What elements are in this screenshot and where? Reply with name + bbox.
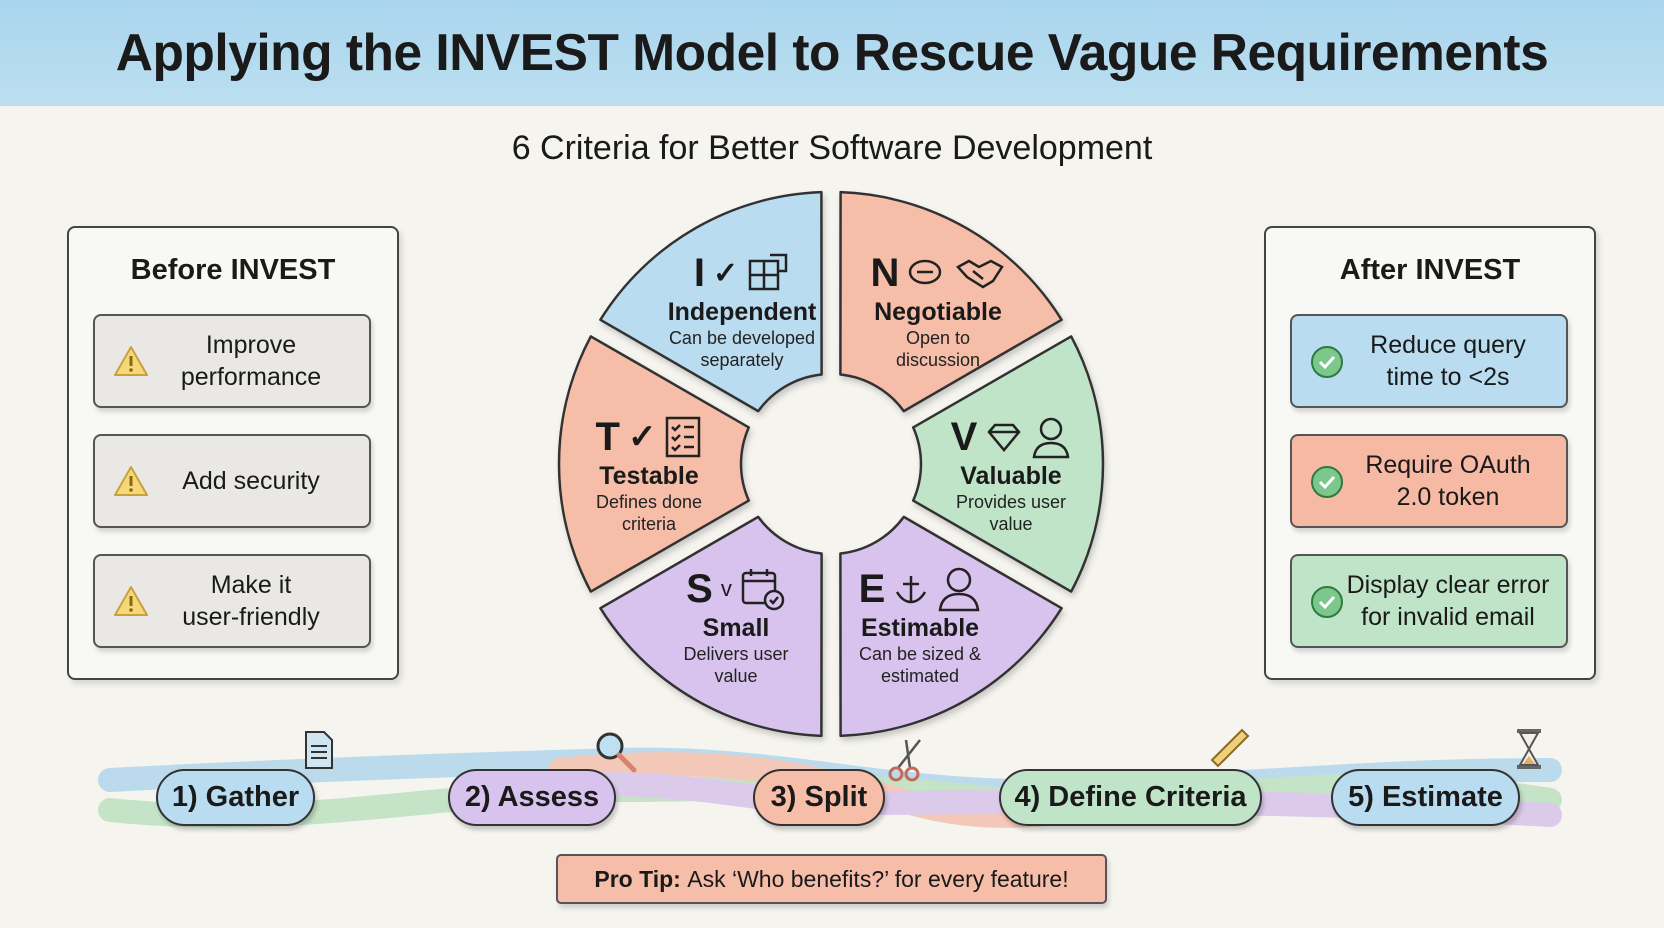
pill: estimate xyxy=(1331,769,1520,826)
callout: pro tip: Ask ‘Who benefits?’ for every feature! xyxy=(687,866,1069,892)
segment: Estimable: Estimable xyxy=(861,614,979,642)
item: require oauth xyxy=(1290,434,1568,528)
item: require oauth: Require OAuth xyxy=(1365,451,1531,479)
title: Applying the INVEST Model to Rescue Vague Requirements xyxy=(116,23,1548,81)
segment: Valuable: value xyxy=(989,514,1033,534)
item: display error: Display clear error xyxy=(1347,571,1549,599)
item: improve performance: Improve xyxy=(206,331,296,359)
item: user-friendly xyxy=(93,554,371,648)
pill: assess xyxy=(448,769,616,826)
segment: Testable xyxy=(596,414,702,534)
segment: Small: value xyxy=(714,666,758,686)
item: display error xyxy=(1290,554,1568,648)
segment: Estimable: Can be sized & xyxy=(859,644,981,664)
icon: document xyxy=(305,731,333,769)
segment: Estimable xyxy=(859,566,981,686)
segment: Valuable: Provides user xyxy=(956,492,1066,512)
segment: Negotiable xyxy=(871,250,1004,370)
segment: Independent: Can be developed xyxy=(669,328,815,348)
item: add security: Add security xyxy=(182,467,320,495)
segment: Independent: separately xyxy=(700,350,784,370)
segment: Testable: ✓ xyxy=(628,418,656,456)
pill: split: 3) Split xyxy=(771,781,867,813)
segment: Negotiable: Open to xyxy=(906,328,970,348)
segment: Valuable: Valuable xyxy=(960,462,1062,490)
icon: hourglass xyxy=(1517,729,1541,769)
icon: scissors xyxy=(888,739,921,782)
segment: Independent: Independent xyxy=(668,298,816,326)
segment: Testable: T xyxy=(596,414,620,458)
icon: ruler xyxy=(1210,728,1250,768)
item: user-friendly: user-friendly xyxy=(182,603,320,631)
segment: Testable: Defines done xyxy=(596,492,702,512)
pill: define criteria xyxy=(999,769,1262,826)
segment: Small: S xyxy=(686,566,713,610)
segment: Testable: criteria xyxy=(622,514,676,534)
segment: Independent xyxy=(668,250,816,370)
callout: pro tip: Pro Tip: xyxy=(594,866,681,892)
item: improve performance: performance xyxy=(181,363,321,391)
segment: Negotiable: Negotiable xyxy=(874,298,1002,326)
segment: Estimable: estimated xyxy=(881,666,959,686)
segment: Testable: Testable xyxy=(599,462,699,490)
item: reduce query time xyxy=(1290,314,1568,408)
segment: Estimable: E xyxy=(859,566,885,610)
item: display error: for invalid email xyxy=(1361,603,1535,631)
pill: define criteria: 4) Define Criteria xyxy=(1014,781,1247,813)
segment: Small: Small xyxy=(703,614,769,642)
pill: estimate: 5) Estimate xyxy=(1348,781,1503,813)
callout: pro tip xyxy=(556,854,1107,904)
segment: Valuable xyxy=(950,414,1070,534)
segment: Small: Delivers user xyxy=(683,644,789,664)
item: require oauth: 2.0 token xyxy=(1397,483,1499,511)
icon: magnifier xyxy=(596,732,636,772)
pill: split xyxy=(753,769,885,826)
segment: Small: v xyxy=(721,576,732,601)
subtitle: 6 Criteria for Better Software Development xyxy=(512,129,1152,167)
item: improve performance xyxy=(93,314,371,408)
pill: gather: 1) Gather xyxy=(172,781,299,813)
header band xyxy=(0,0,1664,106)
item: user-friendly: Make it xyxy=(211,571,291,599)
segment: Small xyxy=(683,566,789,686)
segment: Negotiable: discussion xyxy=(896,350,980,370)
pill: assess: 2) Assess xyxy=(465,781,599,813)
segment: Negotiable: N xyxy=(871,250,899,294)
segment: Independent: I xyxy=(694,250,705,294)
item: reduce query time: time to <2s xyxy=(1386,363,1509,391)
heading: after: After INVEST xyxy=(1340,254,1520,286)
item: add security xyxy=(93,434,371,528)
segment: Valuable: V xyxy=(951,414,977,458)
segment: Independent: ✓ xyxy=(713,256,738,290)
pill: gather xyxy=(156,769,315,826)
item: reduce query time: Reduce query xyxy=(1370,331,1526,359)
panel: after INVEST xyxy=(1264,226,1596,680)
panel: before INVEST xyxy=(67,226,399,680)
heading: before: Before INVEST xyxy=(131,254,335,286)
